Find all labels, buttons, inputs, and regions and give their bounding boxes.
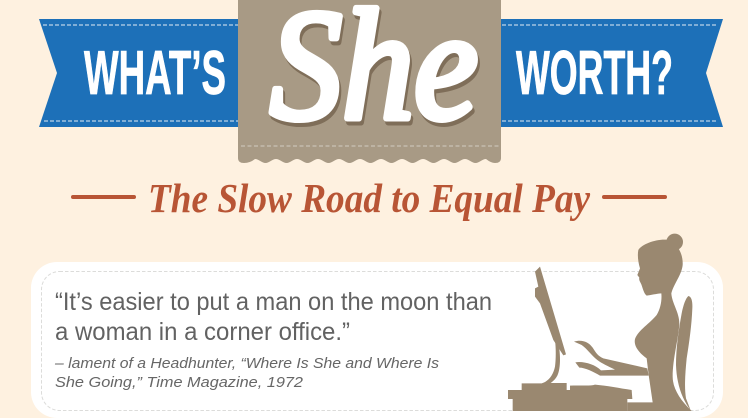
quote attribution xyxy=(54,355,440,391)
arms and hands xyxy=(574,341,649,376)
heading: What's: WHAT’S xyxy=(84,39,226,108)
quote text: a woman in a corner office.” xyxy=(55,318,350,346)
quote attribution: – lament of a Headhunter, “Where Is She and Where Is xyxy=(54,355,440,372)
desk and keyboard xyxy=(508,340,632,411)
quote text: “It’s easier to put a man on the moon than xyxy=(55,288,492,316)
woman silhouette xyxy=(574,234,692,411)
left blue ribbon banner xyxy=(39,19,240,127)
chair xyxy=(676,296,692,410)
quote attribution: She Going,” Time Magazine, 1972 xyxy=(55,374,304,391)
quote text xyxy=(55,288,492,346)
right blue ribbon banner xyxy=(500,19,723,127)
tan scalloped tag xyxy=(238,0,501,163)
subtitle with side rules: The Slow Road to Equal Pay xyxy=(148,175,591,221)
panel: quote card xyxy=(31,262,723,418)
icon: woman typing at computer xyxy=(508,234,692,411)
monitor xyxy=(535,267,566,355)
